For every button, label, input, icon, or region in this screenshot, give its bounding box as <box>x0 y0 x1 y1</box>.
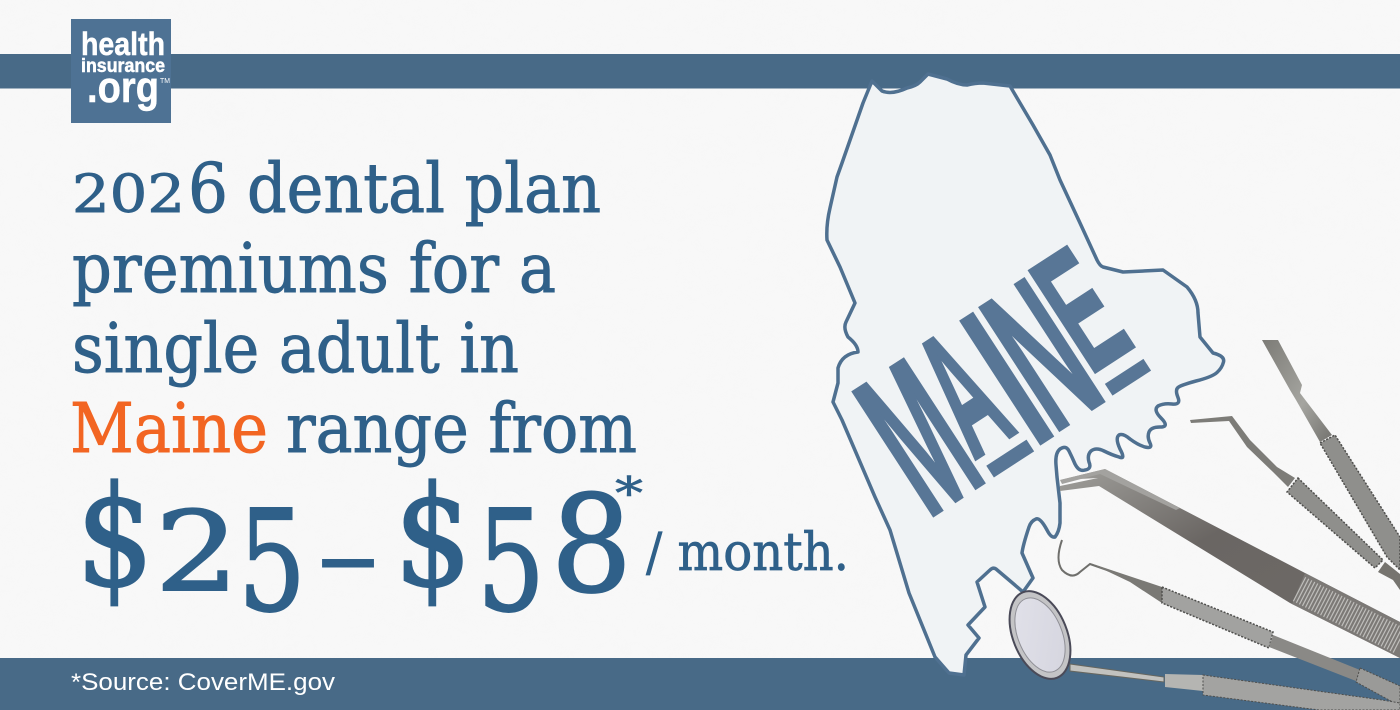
headline <box>70 150 637 469</box>
headline: range from <box>286 390 637 469</box>
instrument: dental mirror <box>998 582 1400 710</box>
instrument: curved probe <box>1190 416 1400 590</box>
price range: 8 <box>551 467 632 623</box>
price range: / month. <box>646 523 849 583</box>
logo: .org <box>87 63 159 112</box>
top band <box>0 54 1400 88</box>
state name lettering: A <box>884 293 1041 494</box>
logo: health <box>81 26 165 62</box>
state outline <box>827 74 1224 675</box>
state name lettering: N <box>949 237 1134 472</box>
logo: TM <box>160 78 170 85</box>
price range: 2 <box>155 488 239 616</box>
bottom band <box>0 658 1400 710</box>
headline: 6 <box>188 150 228 229</box>
state name lettering: M <box>823 317 1014 557</box>
price range: $ <box>394 456 472 618</box>
Maine state map <box>822 74 1224 675</box>
price range: – <box>318 497 378 614</box>
headline: single adult in <box>72 310 519 389</box>
price range <box>76 456 849 644</box>
state name lettering: I <box>931 272 1084 486</box>
dental instruments <box>998 340 1400 710</box>
state name lettering: E <box>1004 212 1158 408</box>
logo: insurance <box>81 56 165 77</box>
tweezers grip ribs <box>1299 589 1400 641</box>
source note: *Source: CoverME.gov <box>71 669 335 696</box>
instrument: hook probe <box>1058 540 1400 706</box>
headline: Maine <box>70 390 268 469</box>
headline: 202 <box>72 165 185 225</box>
price range: $ <box>76 456 154 618</box>
price range: * <box>615 467 643 520</box>
headline: dental plan <box>247 150 601 229</box>
price range: 5 <box>238 481 306 644</box>
instrument: spatula <box>1262 340 1400 570</box>
price range: 5 <box>477 481 545 644</box>
state name lettering <box>822 208 1180 557</box>
instrument: tweezers <box>1060 469 1400 658</box>
headline: premiums for a <box>72 230 556 309</box>
logo <box>71 19 171 123</box>
